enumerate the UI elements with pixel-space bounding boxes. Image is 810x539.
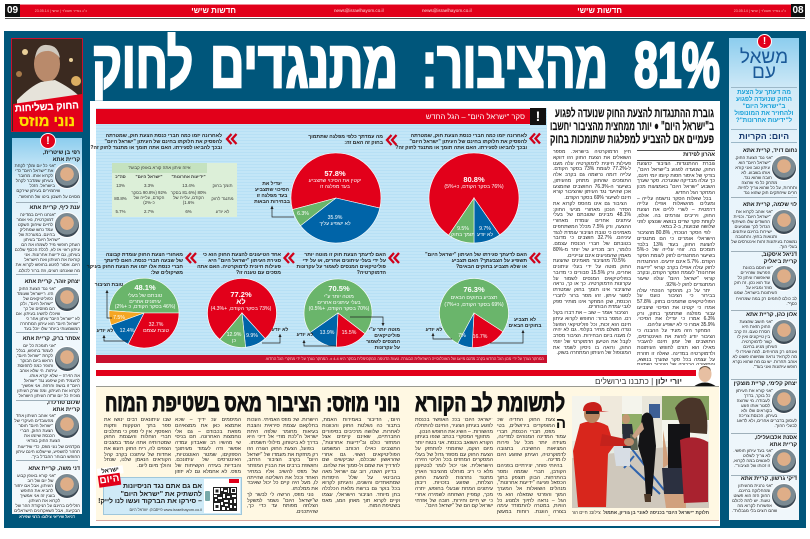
reader: Yitzhak Kalimi: יצחק קלימי, קריית מוצקין <box>734 381 797 387</box>
question 6: אחד הטיעונים להצעת החוק הוא כי <box>203 251 282 258</box>
reader: Osnat <box>733 435 797 474</box>
question 5: על ידי בעלי עיתונים אחרים, או על ידי <box>303 257 386 264</box>
label: politicians, bias pie <box>297 317 400 351</box>
chart: who the bill favours pie: (70% בסקר הקודם, +0.5%) <box>309 306 370 312</box>
question 5: פוליטיקאים המנסים לשמור על עקרונות <box>297 263 387 270</box>
question 4: האם לדעתך סגירתו של העיתון "ישראל היום" <box>425 251 528 258</box>
icon: exclamation box <box>530 108 546 125</box>
section title: today the Krayot <box>731 129 797 143</box>
survey method footer: המחקר נערך על ידי מכון הגל החדש בקרב מדגם מייצג של האוכלוסייה הישראלית הבוגרת. טעות הדגימה המקסימלית בסקר היא 4.4 ±. המחקר נערך על ידי מחקרי הגל החדש. <box>265 356 544 361</box>
comparison table: מתנגד לחוק <box>211 196 234 201</box>
header bar: news@israelhayom.co.il <box>334 8 384 13</box>
chart: democracy claim pie: לא <box>236 297 246 306</box>
header bar: כ"ג באייר תשע"ד | שישי | 23.05.14 <box>734 9 786 13</box>
comparison table <box>112 163 237 217</box>
article column right: לפי הסקר הנוכחי, 80.8% מהציבור הישראלי אומרים כי הם מתנגדים להצעת החוק, בעוד 13% בלבד תומכים בה. זוהי עלייה של כ-5% בשיעור המתנגדים לחוק לעומת הסקר הקודם. 5.7% אינם יודעים. ההתנגדות לחוק עולה אפילו בקרב קוראי "ידיעות אחרונות" לעומת הסקר הקודם, ובקרב קוראי "ישראל היום" עולה שיעור המתנגדים לחוק ל-92%. <box>637 230 715 288</box>
survey header bar <box>96 109 530 124</box>
comparison table: 92% (90.8% בסקר הקודם, עלייה של כ-2%) <box>131 190 167 205</box>
chart: party vote effect pie: 35.9% <box>328 215 343 221</box>
article byline: אהרון לפידות <box>683 152 715 158</box>
question 7: משיקולים של: <box>151 269 183 276</box>
poll question: מה דעתך על הצעת החוק שנועדה לפגוע ב"ישראל היום" ולהחזיר את המונופול ל"ידיעות אחרונות"? <box>734 89 794 124</box>
opinion column 2: נוני מוזס, הרשה לי לבשר לך ש"ישראל היום" נשמר למשקל הצלחה מפותח עד כדי כך, שהיתכנים. <box>247 492 318 515</box>
header bar: 09 <box>7 5 18 16</box>
comparison table: לא יודע <box>216 209 229 214</box>
article byline <box>637 150 715 161</box>
man in red overalls <box>573 421 614 507</box>
chart: motives pie <box>109 278 179 348</box>
reader: Osnat: "אני בעד עיתון חופשי. לא צריך לשלוט לאנשים במה לקרוא, זו זכותו של הציבור". <box>733 448 773 468</box>
comparison table: תומך בחוק <box>212 183 232 188</box>
reader: Alon Cohen: אלון כהן, קריית אתא <box>746 312 797 318</box>
question 3: להפסיק את חלוקתו בחינם של העיתון "ישראל היום" <box>105 138 222 145</box>
reader: Nachum David: נחום דויד, קריית אתא <box>743 148 797 154</box>
question 4: או שלא תצביע בחוקים הבאים? <box>456 263 528 270</box>
opinion column 1 <box>322 418 400 509</box>
panel: opinion section background <box>96 386 719 521</box>
reader: Anat Lif: "אנחנו חיים במדינה דמוקרטית, נאי אומר לחיים שיחוק השקט עמד נחש שמחליק בחינם. במערכת של "ישראל היום" בעיתון העתק חופשי מי? לשמחו את הם עיתון ראוי אז לא, לכלת הכסף שלכם בעיתון, גם ידיעות אחרונות. אני קוראת את העיתון ואת הישראל היום. אסור לפגוע בחופש לקרוא את מה שאנחנו רוצים, וזה ברור לכולם. <box>15 212 80 273</box>
report byline bar <box>96 370 696 376</box>
caption band <box>13 94 82 131</box>
panel: survey infographic <box>96 108 547 363</box>
icon: red alert right: ! <box>763 36 766 47</box>
article column right <box>637 162 715 365</box>
ad text: – סירקו את הברקוד ועשו לנו לייק! <box>98 498 202 505</box>
label: politicians, bias pie: על עקרונות <box>375 344 400 351</box>
question 1 <box>395 132 540 151</box>
question 1: לאחרונה יזמו כמה חברי כנסת הצעת חוק, שמטרתה <box>411 132 527 139</box>
article column left: הציבור גם אינו מהסס לקרוא את הסדר הנכון מאחורי מניעי החוק: 48.1% מבינים שטובתם של בעלי עיתונים אחרים עומדת מאחורי ההצעה, ורק 7.5% מכלל המשתתפים מאמינים כי טובת הציבור עומדת לנגד עיניהם. 32.7% חושבים כי מדובר בטובתם של חברי הכנסת עצמם. כלומר, רוב מכריע של יותר מ-80% מאמין שהמניעים אינם ענייניים. <box>553 201 631 258</box>
reader: Dikla Gershon: דיקי גרשון, קריית אתא <box>741 476 797 482</box>
chart: party vote effect pie: בעד מפלגה זו <box>320 183 350 190</box>
poll title: עם <box>752 62 776 83</box>
poll title: משאל <box>740 47 788 68</box>
icon: red alert left: ! <box>46 135 50 147</box>
question 3 <box>90 132 236 151</box>
left photo: Noni Mozes <box>11 38 83 132</box>
chart: support or oppose pie: תומך בחוק <box>451 232 475 238</box>
question 5 <box>297 251 399 276</box>
logo: Israel Hayom: ישראל <box>101 467 119 475</box>
logo: Israel Hayom <box>96 465 124 488</box>
chart: democracy claim pie <box>207 278 276 347</box>
white content area <box>90 101 720 526</box>
opinion column 2 <box>247 418 318 515</box>
comparison table: "ידיעות אחרונות" <box>171 174 206 179</box>
icon: red alert right <box>757 34 772 49</box>
editorial text right column <box>497 418 566 516</box>
chart: voting intent pie: 16.7% <box>473 334 488 340</box>
reader: Daniel Iskov: קריית ביאליק <box>764 258 797 264</box>
chart: democracy claim pie: 12.9% <box>227 332 242 338</box>
chart: support or oppose pie: 9.7% <box>479 226 491 232</box>
chart: party vote effect pie: לא ישפיע עליך <box>319 220 351 227</box>
reader: Rafi Ben Shitrit: "אני כל יום ומלך לקחת את "ישראל היום" כדי לקרוא אותו. מחובר בעיתון שמדבר לקהל בישראל. הזכל שיחמירים בעיתון שירקם מסוים על חשבון ביטו של החופש". <box>15 163 80 199</box>
comparison table: "ישראל היום" <box>136 174 162 179</box>
label: not sure, democracy pie: לא יודע <box>272 326 288 333</box>
panel: poll of the people <box>729 38 799 520</box>
chart: who the bill favours pie: 13.9% <box>320 330 335 336</box>
question 2: מה עמדתך כלפי מפלגה שתתמוך <box>308 133 383 140</box>
reporter portrait <box>694 366 716 386</box>
reader: Anat Lif: ענת ליף, קריית אתא <box>30 205 80 211</box>
chart: support or oppose pie: לא יודע <box>477 231 493 238</box>
dividers, right readers <box>731 197 797 476</box>
chart: motives pie: 7.5% <box>113 315 125 321</box>
comparison table: 80% (81.6% בסקר הקודם, עלייה של 1.6%) <box>171 190 206 205</box>
chart: voting intent pie: 7% <box>458 333 466 339</box>
woman with red backpack <box>675 398 707 434</box>
chart: voting intent pie: 76.3% <box>463 285 485 294</box>
logo: Israel Hayom: היום <box>99 473 120 487</box>
label: public good and not sure, motives pie: לא יודע <box>97 327 113 334</box>
article column right: יתר על כן, מהסקר הנוכחי עולה בבירור כי הציבור כועס על הפוליטיקאים שתומכים בחוק. 57.8% אמרו כי יקטינו את הסיכוי שיצביעו עבור מפלגה שתתמוך בחוק, ורק 6.3% אמרו כי יגדילו את הסיכוי. 35.9% אמרו כי לא ישפיע עליהם. <box>637 288 715 328</box>
chart: support or oppose pie: 9.5% <box>457 226 469 232</box>
ad text: אם גם אתם נגד הניסיונות <box>123 483 202 490</box>
label: public good and not sure, motives pie <box>95 282 128 341</box>
reader: Osnat: קריית אתא <box>770 442 797 448</box>
reader: Daniel Iskov: דניאל איסקוב, <box>761 252 797 258</box>
reader: Yitzhak Kalimi: "אני קורא את העיתון כל בוקר, בדרך לעבודה. מי שרוצה לסגור אותו פוגע בקוראים שלו ולא בעיתון. הכנסת צריכה לעסוק בדברים אחרים, ולא לדאוג לבעלי ההון". <box>736 388 797 428</box>
question 1: ובכך להביאו לסגירתו. האם אתה תומך או מתנגד לחוק זה? <box>395 144 527 151</box>
label: politicians, bias pie: מוטה יותר ע"י <box>369 327 400 333</box>
header bar: news@israelhayom.co.il <box>422 8 472 13</box>
label: raises chance: בבחירות הבאות <box>254 199 291 205</box>
caption band: נוני מוזס <box>19 113 75 130</box>
reader: Shalom Turaldo: שלום טורלדו, <box>47 400 80 406</box>
icon: exclamation box: ! <box>536 108 540 124</box>
QR code card <box>204 479 240 513</box>
photo: distribution at the university <box>572 396 709 508</box>
poll title <box>740 47 788 83</box>
question 5: הדמוקרטיה? <box>357 270 387 276</box>
icon: red alert left <box>40 133 56 149</box>
label: raises chance <box>254 180 294 217</box>
question 2 <box>308 133 396 146</box>
label: not sure, voting pie <box>426 316 542 343</box>
chart: party vote effect pie: 6.3% <box>297 211 309 217</box>
comparison table: 13% <box>116 183 125 188</box>
label: raises chance: הסיכוי שתצביע <box>255 187 289 193</box>
main headline: לחוק <box>92 27 193 101</box>
chart: democracy claim pie: כן <box>232 338 236 344</box>
reader: Levi Shlomo: לוי שלמה, קריית אתא <box>743 202 797 208</box>
chart: motives pie: טובתם של בעלי <box>128 292 163 299</box>
chart: party vote effect pie <box>291 153 381 243</box>
question 7 <box>87 252 196 276</box>
article column left: חיץ הדמוקרטיה בישראל. מספר השואלים את הצעת החוק הזו דווקא פעילות חיונית לדמוקרטיה עלה מעט ל-77.2% לעומת 73% בסקר הקודם. עלייה דומה נרשמה גם בקרב אלה התומכים שהחוק מתחק מהעיתון, בשיעור ה-76.3% החושבים שהמצעו אכן שהיעד נגד העיתון שהציבור קורא חינם לשיעור 69% בסקר הקודם. <box>553 150 631 201</box>
question 6: פעילות חיונית לדמוקרטיה. האם אתה <box>197 263 282 270</box>
reader: Dani Moshe: דני משה, קריית אתא <box>28 466 80 472</box>
label: not sure, voting pie: לא תצביע <box>514 316 536 323</box>
photographer credit: דניאל שיריאי צילום: הרצי שפירא <box>19 515 75 519</box>
header bar: חדשות שישי <box>577 6 622 15</box>
comparison table: סה"כ <box>115 174 126 179</box>
reader: Shalom Turaldo: קריית אתא <box>53 406 80 412</box>
label: politicians, bias pie: המנסים לשמור <box>366 338 400 345</box>
label: public good and not sure, motives pie: טובת הציבור <box>95 282 124 288</box>
chart: voting intent pie <box>439 279 508 348</box>
chart: who the bill favours pie: בעלי עיתונים אחרים <box>317 299 361 306</box>
comparison table: 6% <box>185 209 192 214</box>
reporter byline: יורי ילון | כתבנו בירושלים <box>595 377 682 386</box>
question 4 <box>425 251 540 270</box>
reader: Shalom Turaldo: "אני אוהב העיתון אחד מהעובדים העיקרי של "ישראל היום" חוסר הצעת החוק, חברי הכנסת שיזמו את הצעת החוק בוודאי מקדמים של נוני מוזס, כדי שידיעות תחזור להשפיע, שיישלטו חינם עיתון החופש הבוחר ההבדל בין". <box>14 413 80 459</box>
question 7: חברי כנסת אלו יזמו את הצעת החוק בעיקר <box>87 263 183 270</box>
label: not sure, voting pie: בחוקים הבאים <box>509 323 542 329</box>
ad text: להשתיק את "ישראל היום" <box>121 491 202 498</box>
question 1: להפסיק את חלוקתו בחינם של העיתון "ישראל היום" <box>410 138 527 145</box>
article column right: בכל שאלות הסקר נרשמה עלייה – ומעלים מהשאלות אפילו עלייה דרמטית – לשרי לליים את הצעת החוק, ויריבים וגורמים בה. אולם, לקוחת סקר שרים בנושא שנוצקו לפני שלושה שבועות, ב-2 במאי. <box>637 196 715 230</box>
chart: party vote effect pie: 57.8% <box>324 169 346 178</box>
main headline: 81% <box>634 29 720 101</box>
reader: Osnat: אסנת אלבועלילו, <box>754 435 797 441</box>
label: not sure, voting pie: לא יודע <box>426 326 442 333</box>
question 6: סגירת העיתון "ישראל היום" היא <box>208 257 281 264</box>
survey method footer <box>96 355 547 363</box>
article headline <box>550 106 714 146</box>
chart: who the bill favours pie: מוטה יותר ע"י <box>324 294 354 300</box>
article column left <box>553 150 631 356</box>
question 5: האם לדעתך הצעת חוק זו מוטה יותר <box>304 251 387 258</box>
comparison table: 80.8% <box>114 196 127 201</box>
article column right: גוברת ההתנגדות. הציבור להצעת החוק, שנועדה לפגוע ב"ישראל היום", בודקי של איסור חסות קיומו יומי חינם, כך עולה מבדיקה שנערכה. סקר שערך השבוע "ישראל היום" באמצעות מכון המחקר הגל החדש. <box>637 162 715 196</box>
caption band: החוק בשליחות <box>15 99 79 115</box>
opinion column 1: בדיוק השנה, רוב עם ישראל מאה בהבינאי על שלל היסודות שמתאחדים והשנים, והעיתון לקרוא בכל בוקר גם ברשת מלאת הכלכלה בחן מיוחד. הציבור הישראלי, עצמו וקיים לקרוא תוך מאוזן המג, מאס בשטיפת המוח. <box>322 469 400 509</box>
chart: voting intent pie: תצביע בחוקים הבאים <box>451 295 498 301</box>
chart: democracy claim pie: 9.9% <box>246 333 258 339</box>
header bar: כ"ג באייר תשע"ד | שישי | 23.05.14 <box>35 9 87 13</box>
comparison table: איזה עיתון אתה קורא באופן קבוע? <box>128 165 191 170</box>
header bar: 08 <box>792 5 804 16</box>
ad: QR campaign <box>103 477 242 515</box>
chart: party vote effect pie: יקטין את הסיכוי שתצביע <box>309 178 361 184</box>
label: raises chance: יגדיל את <box>262 180 282 187</box>
editorial text left column: מתוקף המסקרי בכתב שנפו בעיתון הקורא השואב בכנסת. אני בטוח יותר מיום הוקם, שחומתי להתחזק על הצעת החוק עם מספר גדול של בעלי המסקרים המחזים בכל הליטי הזירה הישראלית. אני יכול לומר לבטיוקון מלא כי ריב מוחלט מהציבור הארץ מתנגד נחרצות להצעת החוק הצלחת, שפוגע בזכויות. ריבוזן עיתונים המחת שבעלי בחופש, יתרה מכך, קמפיין השחתה לשמירה אחרי כי יש חיים וחירות. חובה של אזרחי ישראל קם הם של "ישראל היום". <box>415 434 493 509</box>
panel: left readers <box>12 138 82 514</box>
question 7: של שבעה חברי כנסת. האם לדעתך <box>104 257 183 264</box>
reader: Alon Cohen: "אני חושב שהצעת החוק הזאת היא חסרת טעם. זה קרב בין טייקונים ואין לו קשר לדמוקרטיה. העיתון מגיע בחינם ואנחנו רק מרוויחים. למה שיגידו לי מה לקרוא? נראה שמישהו פשוט לא אוהב תחרות. יש גם מה שהוא נקרא חופש עיתונות ואני בעד". <box>732 318 797 369</box>
ad text <box>98 483 202 505</box>
main headline: מתנגדים <box>210 27 398 101</box>
chart: motives pie: 12.4% <box>120 328 135 334</box>
comparison table: 2.7% <box>144 209 154 214</box>
comparison table: 13.4% <box>182 183 195 188</box>
chart: support or oppose pie <box>429 153 519 243</box>
comparison table: 5.7% <box>115 209 126 214</box>
header bar <box>5 4 805 19</box>
chart: motives pie: 48.1% <box>134 283 156 292</box>
woman in black <box>638 412 656 496</box>
comparison table: 3.3% <box>144 183 154 188</box>
reader: Rafi Ben Shitrit: קריית אתא <box>53 156 80 162</box>
section title: today the Krayot: היום: הקריות <box>739 131 789 141</box>
chart: motives pie: 32.7% <box>149 322 164 328</box>
question 7: מאחורי הצעת החוק עומדת קבוצה <box>106 252 183 258</box>
survey header bar: סקר "ישראל היום" – הגל החדש <box>426 112 525 121</box>
question 6: מסכים עם טענה זו? <box>236 270 281 276</box>
label: raises chance: בעד מפלגה זו <box>257 192 288 199</box>
reader: Daniel Iskov: "יש חוסם בכוונת הפרשה שזהירים שיאפשרו עיתון כל עוד הוא נכון. זה חוק מוזר ומביא על העיתונות בישראל. שמנו לב כולם לוחמים רק במה שמרוויח כסף". <box>734 265 797 306</box>
chart: who the bill favours pie <box>304 279 372 347</box>
article column left: 70.5% מהציבור מאמינים שהצעת החוק מוטה על ידי בעלי עיתונים אחרים, ורק 15.5% סבורים כי מדובר בפוליטיקאים המנסים לשמור על עקרונות הדמוקרטיה. כך או כך, נראה שהציבור אינו תומך בחוק שמטרתו לסגור עיתון. זהו מסר ברור לחברי הכנסת, שכן המחקר אינו מותיר ספק לגבי עמדת הבוחרים. <box>553 258 631 310</box>
chart: who the bill favours pie: 15.5% <box>342 330 357 336</box>
label: politicians, bias pie: פוליטיקאים <box>374 332 400 339</box>
chart: motives pie: (46% בסקר הקודם, כ +2%) <box>115 304 176 310</box>
editorial text right column: צעת החוק החדיה של המופקדים בירושלים, בטי מוזס, חברי הכנסת, חברי עמוד המדינה המנוהים למדינה, מעידה יותר מכל על פירות המציאות החשיבה. בתגובה לדמוקרטיה, העיתון שפוגע היום לו מדינה. <box>497 418 566 463</box>
chart: democracy claim pie: (73% בסקר הקודם, +4.3%) <box>211 306 272 312</box>
question 3: לאחרונה יזמו כמה חברי כנסת הצעת חוק, שמטרתה <box>106 132 222 139</box>
question 2: בחוק זה האם זה: <box>344 140 384 146</box>
question 3: ובכך להביאו לסגירתו. האם אתה תומך או מתנגד לחוק זה? <box>90 144 222 151</box>
header bar: חדשות שישי <box>191 6 236 15</box>
reader: Yitzhak Zohar: יצחק זוהר, קריית אתא <box>25 279 80 285</box>
reader: Rafi Ben Shitrit: רפי בן שיטרית, <box>43 150 80 156</box>
main headline: מהציבור: <box>422 27 608 101</box>
chart: support or oppose pie: (76% בסקר הקודם, כ+5%) <box>444 184 504 190</box>
article column left: הציבור אומר – שוב – את דברו בקול רם. המסר ברור: החופש לקרוא עיתון חינם הוא זכות, וכל פוליטיקאי הפועל נגדה משלם מחיר בקלפי. גם לא יהיה לו מענה ביום הבחירות. הציבור מסרב לקבל את הטיעון הדמוקרטי של יוזמי החוק, ורואה בו ניסיון לשמר את המונופול של העיתון המתחרה בשוק. <box>553 310 631 356</box>
chart: motives pie: עיתונים אחרים <box>129 299 161 305</box>
chart: who the bill favours pie: 70.5% <box>328 284 350 293</box>
reader: Levi Shlomo: "אני אוהב לקרוא את "ישראל היום". וכניית החשדים שלו השיתוף הגדול לכך שמגיעים ישירות בחינם עיתונים. ותנואות בחוץ. והתגובה נמשכת בעיתונות זהות אינטרסים של בעלי הון". <box>731 208 797 249</box>
chart: motives pie: טובת עצמם <box>143 328 170 334</box>
chart: voting intent pie: (69% בסקר הקודם, כ+7%) <box>444 302 504 308</box>
dividers and caption, left readers <box>16 202 78 461</box>
main headline <box>92 27 720 101</box>
ad URL: www.israelhayom.co.il פייסבוק: ישראל היום <box>129 507 202 512</box>
label: not sure, democracy pie <box>262 326 288 343</box>
label: politicians, bias pie: לא יודע <box>297 331 313 338</box>
question 4: תשפיע על הצבעתך? האם תצביע <box>452 257 527 264</box>
chart: democracy claim pie: 77.2% <box>230 290 252 299</box>
opinion column 1: היום", הדיבור באמירות האמת, בתבור כה נשלטת החוק והכוונות לאחרות. שלושה מרכיבים בסיפורים החברתיים, שאינם קיימים אצל המחזור כולם וב"ידיעות אחרונות", התוצבים כאילו הכותב המשמעו הפוליטיקאים השווי. גם אחרי שהראשון שבכלם, שביקשים שם להדריך את שמם ול-סמוך את שלהם. <box>322 418 400 469</box>
reader: Dikla Gershon: "אני נהנית מהעיתון ומהחלוקה בחינם. החוק הזה הוא פשוט טעות. יש לתת לכולם אפשרות לקרוא מה שהם רוצים בלי מגבלות". <box>732 482 777 513</box>
chart: support or oppose pie: 80.8% <box>463 175 485 184</box>
question 6 <box>197 251 294 276</box>
reader: Esther Barak: אסתר ברק, קריית אתא <box>23 336 80 342</box>
reader: Dikla Gershon <box>732 476 797 513</box>
opinion column 2: בפועל, הצעת החוק הגורה הזו רק מחזקת את מעמדו של "ישראל היום" בקרב הציבור הרחב, וחושפת ברבים את הבניין המפתר של מוזס להשיב אליו במחיר האחד וככל את השליטה שהייתה לו, מעל היה קיים כל יכול שאיבד את ממלכתו. <box>247 446 318 492</box>
